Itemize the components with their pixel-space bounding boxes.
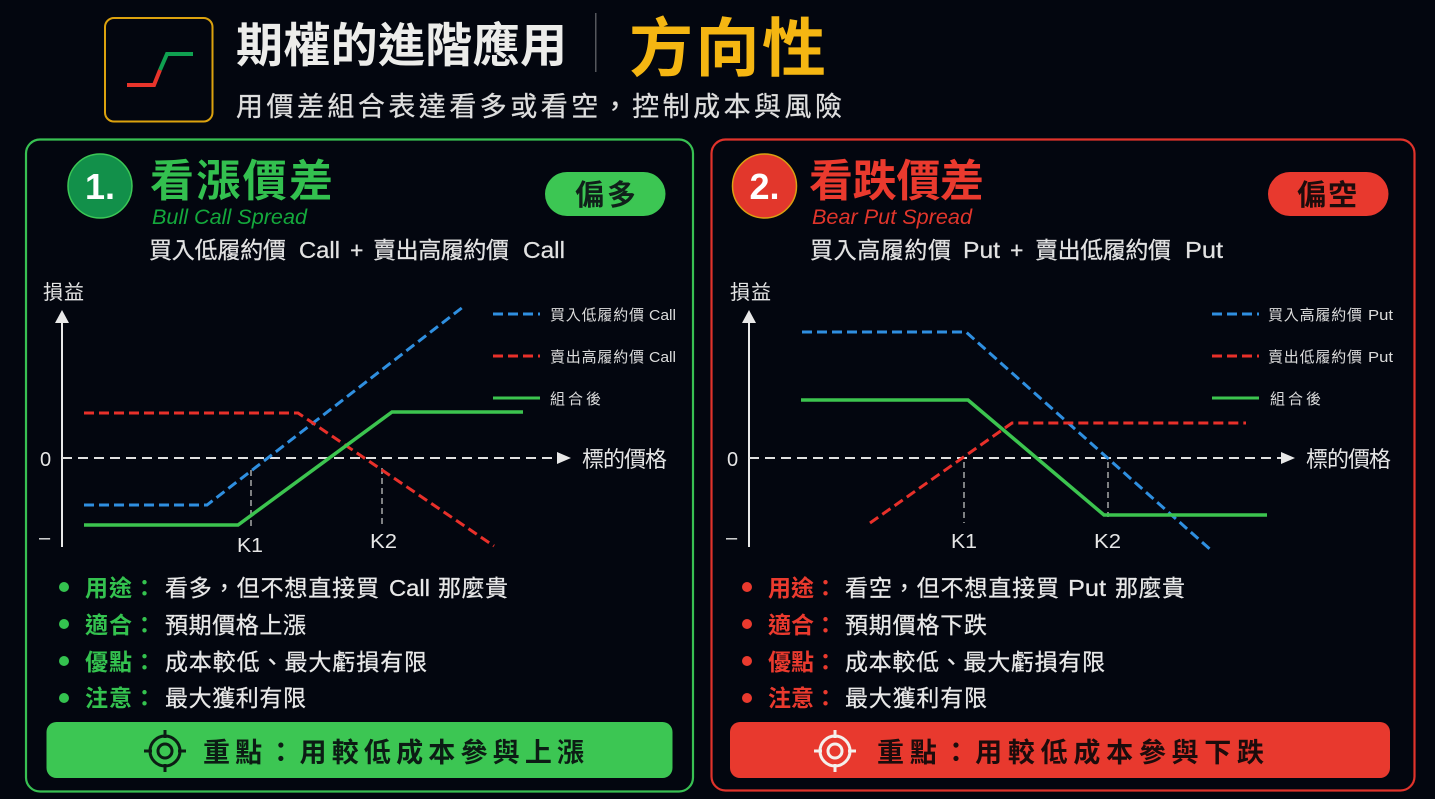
tag: bearish: 偏空 [1297,179,1357,212]
key points list: 看多，但不想直接買 [165,575,379,601]
takeaway bar: 重點：用較低成本參與上漲 [203,738,584,768]
icon: target [814,730,856,772]
header icon: rising payoff line [105,18,212,122]
key points list: Put [1068,575,1107,601]
key points list: 注意： [768,685,837,711]
key points list: 成本較低、最大虧損有限 [165,649,427,675]
chart legend: 賣出低履約價 [1268,349,1362,366]
payoff chart: bull call spread: 損益 [43,281,84,304]
key points list: 優點： [85,649,156,675]
english subtitle: Bull Call Spread [152,206,308,229]
number badge 1 [68,154,132,218]
key points list: 預期價格下跌 [845,612,987,638]
payoff chart: bear put spread [726,281,1391,553]
strategy formula: 買入低履約價 [149,237,286,263]
chart legend [493,307,676,408]
payoff chart: bear put spread: 標的價格 [1306,447,1391,472]
payoff chart: bear put spread: 0 [727,449,738,471]
payoff chart: bull call spread [39,281,667,557]
key points list: Call [389,575,430,601]
payoff chart: bear put spread: – [726,527,738,549]
strategy formula: Call [523,237,565,263]
payoff chart: bull call spread: – [39,527,51,549]
key points list: 注意： [85,685,156,711]
panel heading: 看漲價差 [150,157,333,206]
chart legend: 組合後 [550,391,601,408]
payoff chart: bear put spread: K2 [1094,531,1121,553]
takeaway bar [730,722,1390,778]
tag: bearish [1268,172,1388,216]
strategy formula: 賣出低履約價 [1035,237,1171,263]
chart legend: 買入高履約價 [1268,307,1362,324]
key points list: 優點： [768,649,837,675]
chart legend: 賣出高履約價 [550,349,644,366]
payoff chart: bull call spread: 標的價格 [582,447,667,472]
panel: bear put spread [712,140,1414,790]
strategy formula: Call [299,237,340,263]
chart legend: Put [1368,307,1394,324]
chart legend [1212,307,1394,408]
strategy formula: 賣出高履約價 [373,237,509,263]
takeaway bar [46,722,672,778]
subtitle: 用價差組合表達看多或看空，控制成本與風險 [236,92,842,122]
key points list: 最大獲利有限 [845,685,987,711]
number badge 1: 1. [85,166,115,207]
number badge 2 [732,154,796,218]
chart legend: Call [649,349,676,366]
english subtitle: Bear Put Spread [812,206,973,229]
key points list: 最大獲利有限 [165,685,306,711]
icon: target [144,730,186,772]
strategy formula: 買入高履約價 [810,237,951,263]
strategy formula [810,237,1224,263]
chart legend: Put [1368,349,1394,366]
title highlight: 方向性 [629,13,826,85]
payoff chart: bear put spread: 損益 [730,281,771,304]
panel: bull call spread [26,140,693,792]
key points list: 看空，但不想直接買 [845,575,1059,601]
key points list: 用途： [85,575,156,601]
strategy formula: + [350,237,363,263]
strategy formula: Put [1185,237,1224,263]
strategy formula: Put [963,237,1001,263]
chart legend: 買入低履約價 [550,307,644,324]
key points list: 用途： [768,575,837,601]
payoff chart: bull call spread: K1 [237,535,263,557]
key points list: 適合： [85,612,156,638]
title divider [595,13,596,72]
key points list [59,575,508,711]
key points list: 那麼貴 [1115,575,1185,601]
tag: bullish: 偏多 [575,179,636,212]
chart legend: 組合後 [1270,391,1321,408]
chart legend: Call [649,307,676,324]
payoff chart: bull call spread: 0 [40,449,51,471]
key points list: 預期價格上漲 [165,612,306,638]
key points list: 適合： [768,612,837,638]
number badge 2: 2. [749,166,780,207]
strategy formula [149,237,565,263]
key points list [742,575,1185,711]
title: 期權的進階應用 [236,19,567,72]
payoff chart: bull call spread: K2 [370,531,397,553]
key points list: 那麼貴 [438,575,508,601]
payoff chart: bear put spread: K1 [951,531,977,553]
tag: bullish [545,172,666,216]
key points list: 成本較低、最大虧損有限 [845,649,1105,675]
strategy formula: + [1010,237,1023,263]
panel heading: 看跌價差 [809,157,984,206]
takeaway bar: 重點：用較低成本參與下跌 [877,738,1264,768]
